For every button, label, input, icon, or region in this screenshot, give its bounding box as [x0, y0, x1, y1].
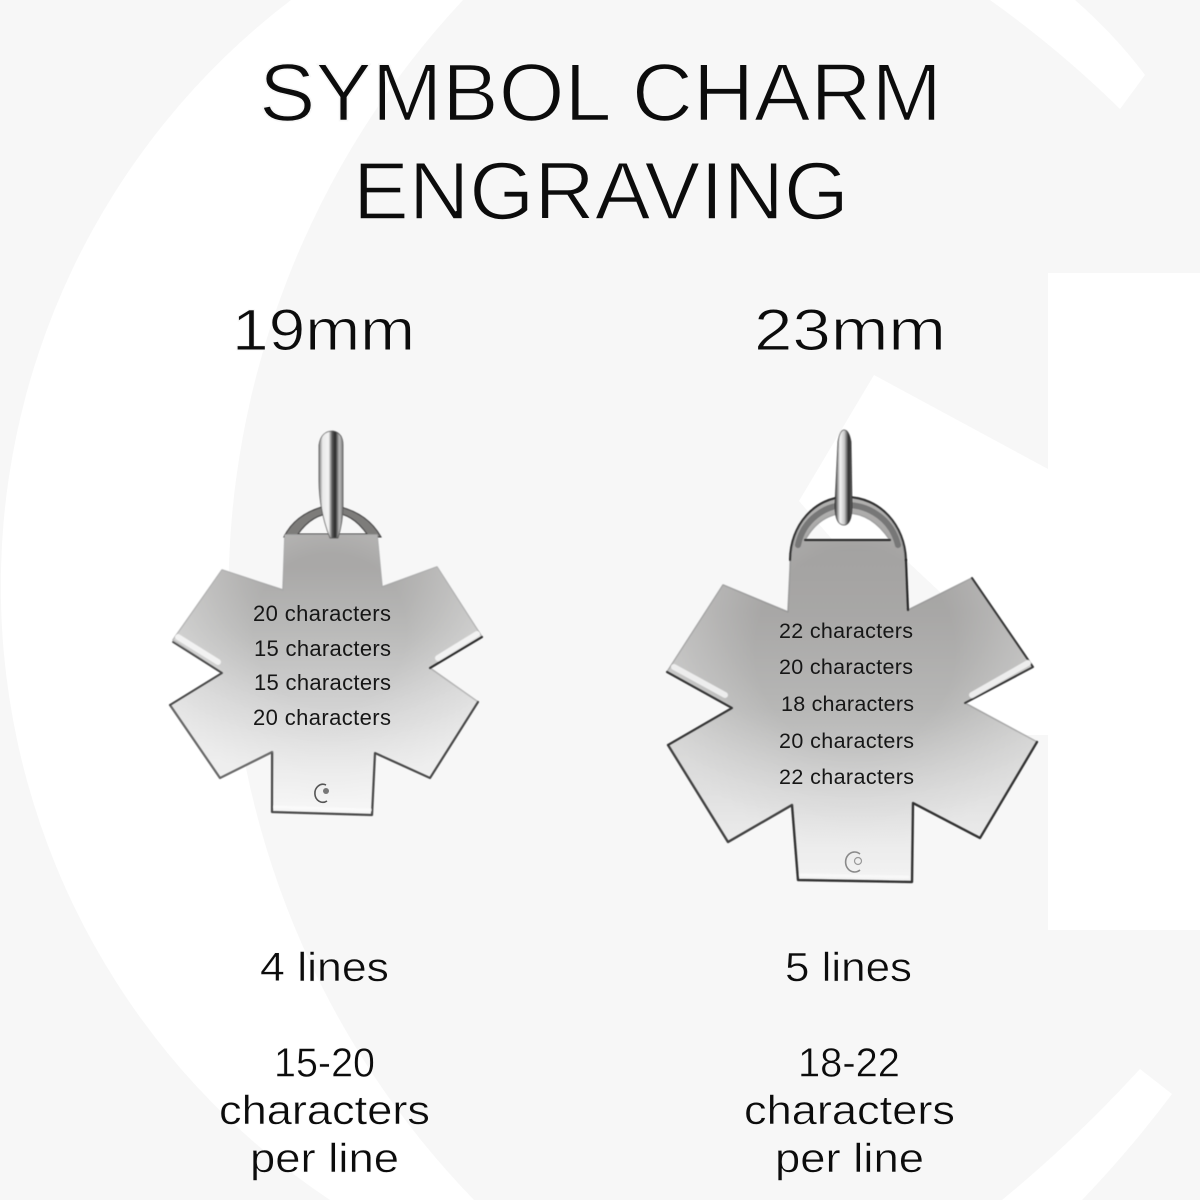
maker mark 23mm — [846, 852, 862, 872]
specs: 23mm: 5 lines — [785, 944, 912, 990]
title: ENGRAVING — [353, 146, 849, 237]
heading: 23mm: 23mm — [754, 298, 946, 363]
specs: 19mm: 15-20 — [274, 1040, 375, 1086]
heading: 19mm: 19mm — [232, 298, 415, 363]
jump ring 23mm — [835, 430, 852, 525]
title: SYMBOL CHARM — [259, 48, 942, 138]
engraving text 19mm — [253, 601, 391, 730]
engraving text 19mm: 20 characters — [253, 705, 391, 730]
specs: 19mm — [219, 944, 430, 1181]
jump ring 19mm — [319, 431, 343, 538]
engraving text 23mm — [779, 619, 914, 789]
star body 19mm — [170, 535, 482, 815]
bail arch 19mm — [284, 505, 381, 537]
background watermark: white star and rectangle — [799, 273, 1200, 930]
edge shading 19mm — [170, 634, 482, 815]
engraving text 19mm: 20 characters — [253, 601, 391, 626]
specs: 19mm: per line — [250, 1135, 399, 1181]
specs: 23mm — [744, 944, 955, 1181]
engraving text 23mm: 20 characters — [779, 655, 913, 679]
charm: 19mm — [170, 431, 482, 815]
title — [259, 48, 942, 237]
charm: 23mm — [667, 430, 1037, 882]
star body with bail 23mm — [667, 497, 1037, 882]
specs: 23mm: per line — [775, 1135, 924, 1181]
specs: 23mm: characters — [744, 1087, 955, 1133]
engraving text 23mm: 22 characters — [779, 765, 914, 789]
engraving text 19mm: 15 characters — [254, 636, 391, 661]
edge shading 23mm — [667, 560, 1037, 882]
specs: 19mm: characters — [219, 1087, 430, 1133]
bail arch shading 23mm — [790, 497, 906, 560]
specs: 23mm: 18-22 — [798, 1040, 900, 1086]
engraving text 23mm: 18 characters — [781, 692, 914, 716]
specs: 19mm: 4 lines — [260, 944, 389, 990]
engraving text 23mm: 22 characters — [779, 619, 913, 643]
engraving text 23mm: 20 characters — [779, 729, 914, 753]
maker mark 19mm — [315, 784, 329, 802]
engraving text 19mm: 15 characters — [254, 670, 391, 695]
